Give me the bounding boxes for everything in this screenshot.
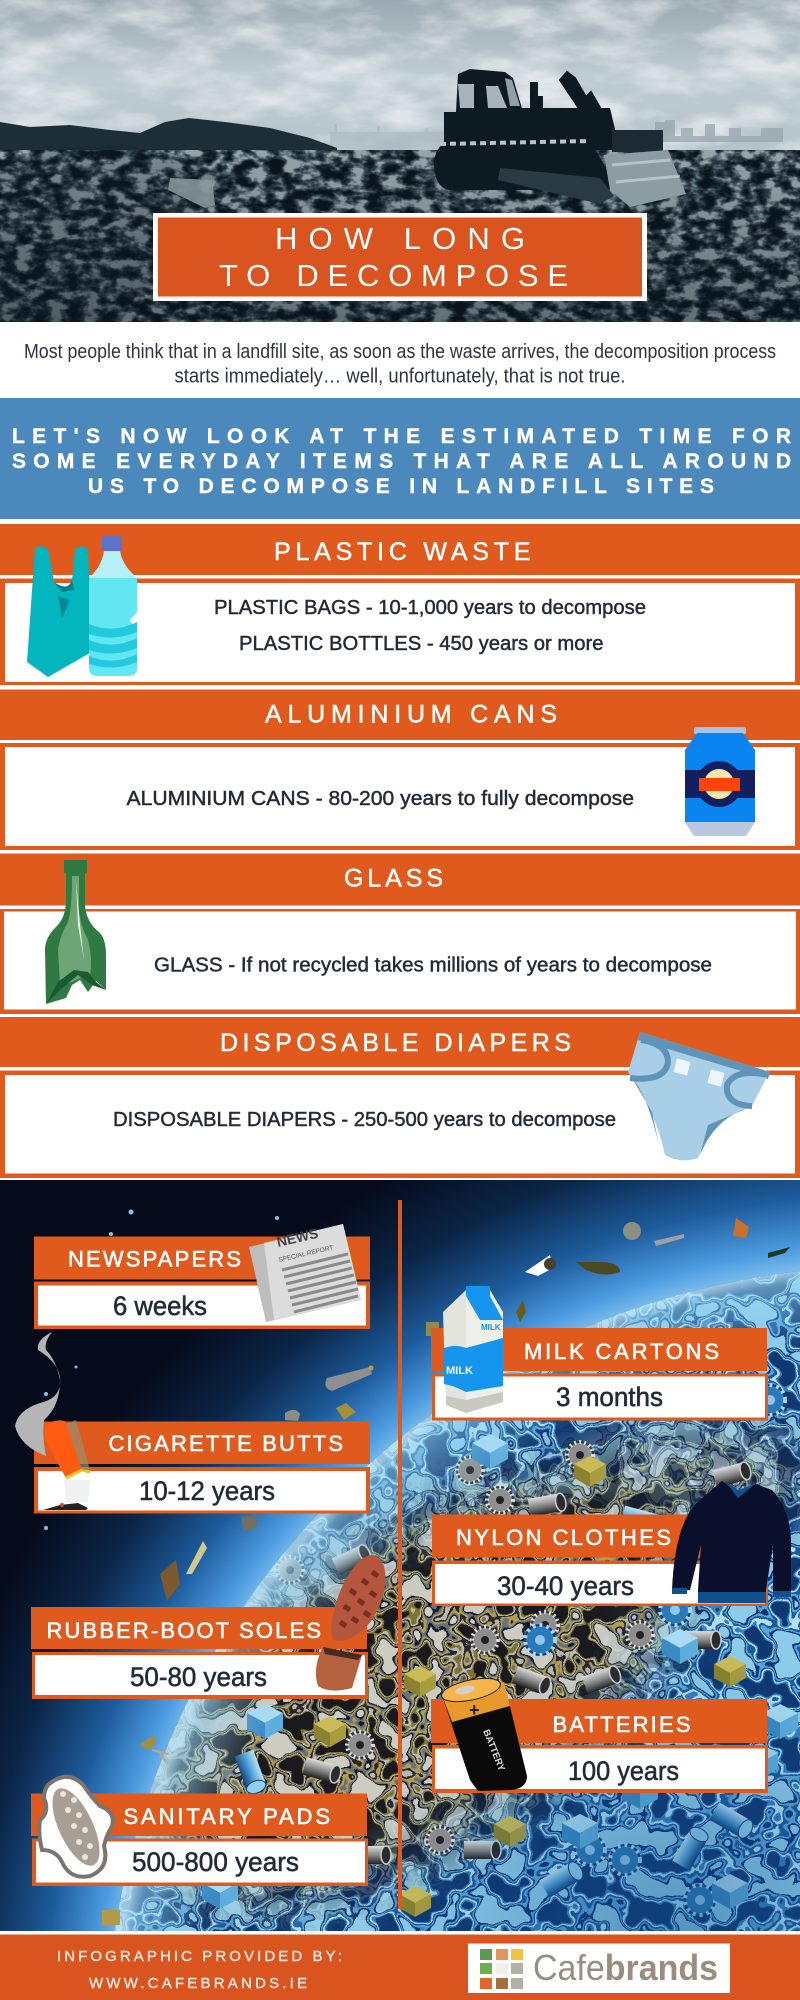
icon: broken green bottle <box>45 860 106 1004</box>
title box: HOW LONG <box>275 221 525 256</box>
card: sanitary pads: SANITARY PADS <box>124 1804 330 1829</box>
blue banner: LET'S NOW LOOK AT THE ESTIMATED TIME FOR <box>12 425 791 448</box>
panel: disposable diapers <box>0 1017 800 1178</box>
panel: plastic waste: PLASTIC BOTTLES - 450 years or more <box>239 633 604 655</box>
card: newspapers: NEWSPAPERS <box>68 1246 241 1272</box>
panel: disposable diapers: DISPOSABLE DIAPERS <box>220 1029 571 1057</box>
stars <box>44 1210 279 1530</box>
card: cigarette butts: CIGARETTE BUTTS <box>108 1431 343 1456</box>
card: sanitary pads: 500-800 years <box>132 1847 299 1877</box>
icon: cigarette <box>15 1332 90 1510</box>
footer bar <box>0 1934 800 2000</box>
card: milk cartons <box>431 1286 768 1420</box>
blue banner <box>0 398 800 519</box>
card: milk cartons: MILK CARTONS <box>524 1339 719 1364</box>
hero photo: bulldozer on landfill <box>0 0 800 322</box>
icon: milk carton <box>443 1286 503 1413</box>
intro text: starts immediately… well, unfortunately, that is not true. <box>174 366 626 388</box>
card: newspapers: 6 weeks <box>113 1291 207 1321</box>
card: cigarette butts: 10-12 years <box>139 1476 275 1506</box>
icon: boot sole <box>316 1555 386 1691</box>
card: milk cartons: 3 months <box>556 1382 663 1412</box>
icon: battery: + <box>469 1700 480 1720</box>
logo: Cafebrands <box>468 1944 730 1993</box>
intro text <box>24 341 776 388</box>
icon: plastic bag <box>27 546 95 677</box>
icon: milk carton: MILK <box>481 1323 501 1332</box>
panel: plastic waste: PLASTIC BAGS - 10-1,000 years to decompose <box>214 597 646 619</box>
panel: aluminium cans: ALUMINIUM CANS <box>265 700 557 728</box>
icon: sanitary pad <box>39 1777 113 1877</box>
footer bar: WWW.CAFEBRANDS.IE <box>89 1975 307 1992</box>
card: rubber-boot soles <box>31 1555 386 1699</box>
panel: aluminium cans: ALUMINIUM CANS - 80-200 years to fully decompose <box>126 788 634 810</box>
title box: TO DECOMPOSE <box>219 258 568 293</box>
centre divider line <box>398 1200 402 1909</box>
card: nylon clothes: NYLON CLOTHES <box>456 1525 671 1550</box>
icon: aluminium can <box>685 727 755 836</box>
card: rubber-boot soles: 50-80 years <box>130 1662 267 1692</box>
logo: Cafebrands: Cafebrands <box>533 1947 718 1988</box>
footer bar: INFOGRAPHIC PROVIDED BY: <box>57 1948 342 1965</box>
card: nylon clothes: 30-40 years <box>497 1571 634 1601</box>
card: batteries: BATTERIES <box>552 1712 690 1737</box>
panel: aluminium cans <box>0 690 800 850</box>
panel: plastic waste: PLASTIC WASTE <box>274 538 530 566</box>
blue banner: US TO DECOMPOSE IN LANDFILL SITES <box>88 475 714 498</box>
card: batteries: 100 years <box>568 1756 679 1786</box>
floating debris <box>102 1218 790 1925</box>
card: sanitary pads <box>31 1777 368 1886</box>
icon: newspaper <box>249 1224 361 1322</box>
panel: space background with planet of waste <box>0 1180 800 1940</box>
card: cigarette butts <box>15 1332 370 1514</box>
icon: plastic bottle <box>89 536 137 676</box>
bulldozer <box>434 69 663 204</box>
panel: disposable diapers: DISPOSABLE DIAPERS - 250-500 years to decompose <box>113 1109 616 1131</box>
panel: glass: GLASS <box>344 864 443 892</box>
icon: sweater <box>672 1481 791 1603</box>
card: newspapers <box>34 1224 370 1329</box>
waste objects <box>202 1385 798 1917</box>
panel: glass: GLASS - If not recycled takes millions of years to decompose <box>154 954 712 976</box>
icon: battery <box>440 1674 527 1791</box>
icon: newspaper: NEWS <box>275 1225 320 1250</box>
card: rubber-boot soles: RUBBER-BOOT SOLES <box>46 1618 321 1643</box>
panel: plastic waste <box>0 524 800 685</box>
icon: milk carton: MILK <box>446 1365 473 1377</box>
title box <box>153 213 647 301</box>
icon: diaper <box>628 1032 770 1160</box>
card: nylon clothes <box>432 1481 791 1606</box>
blue banner: SOME EVERYDAY ITEMS THAT ARE ALL AROUND <box>12 450 791 473</box>
card: batteries <box>431 1674 768 1793</box>
icon: newspaper: SPECIAL REPORT <box>278 1245 334 1264</box>
icon: battery: BATTERY <box>480 1728 507 1773</box>
panel: glass <box>0 854 800 1014</box>
